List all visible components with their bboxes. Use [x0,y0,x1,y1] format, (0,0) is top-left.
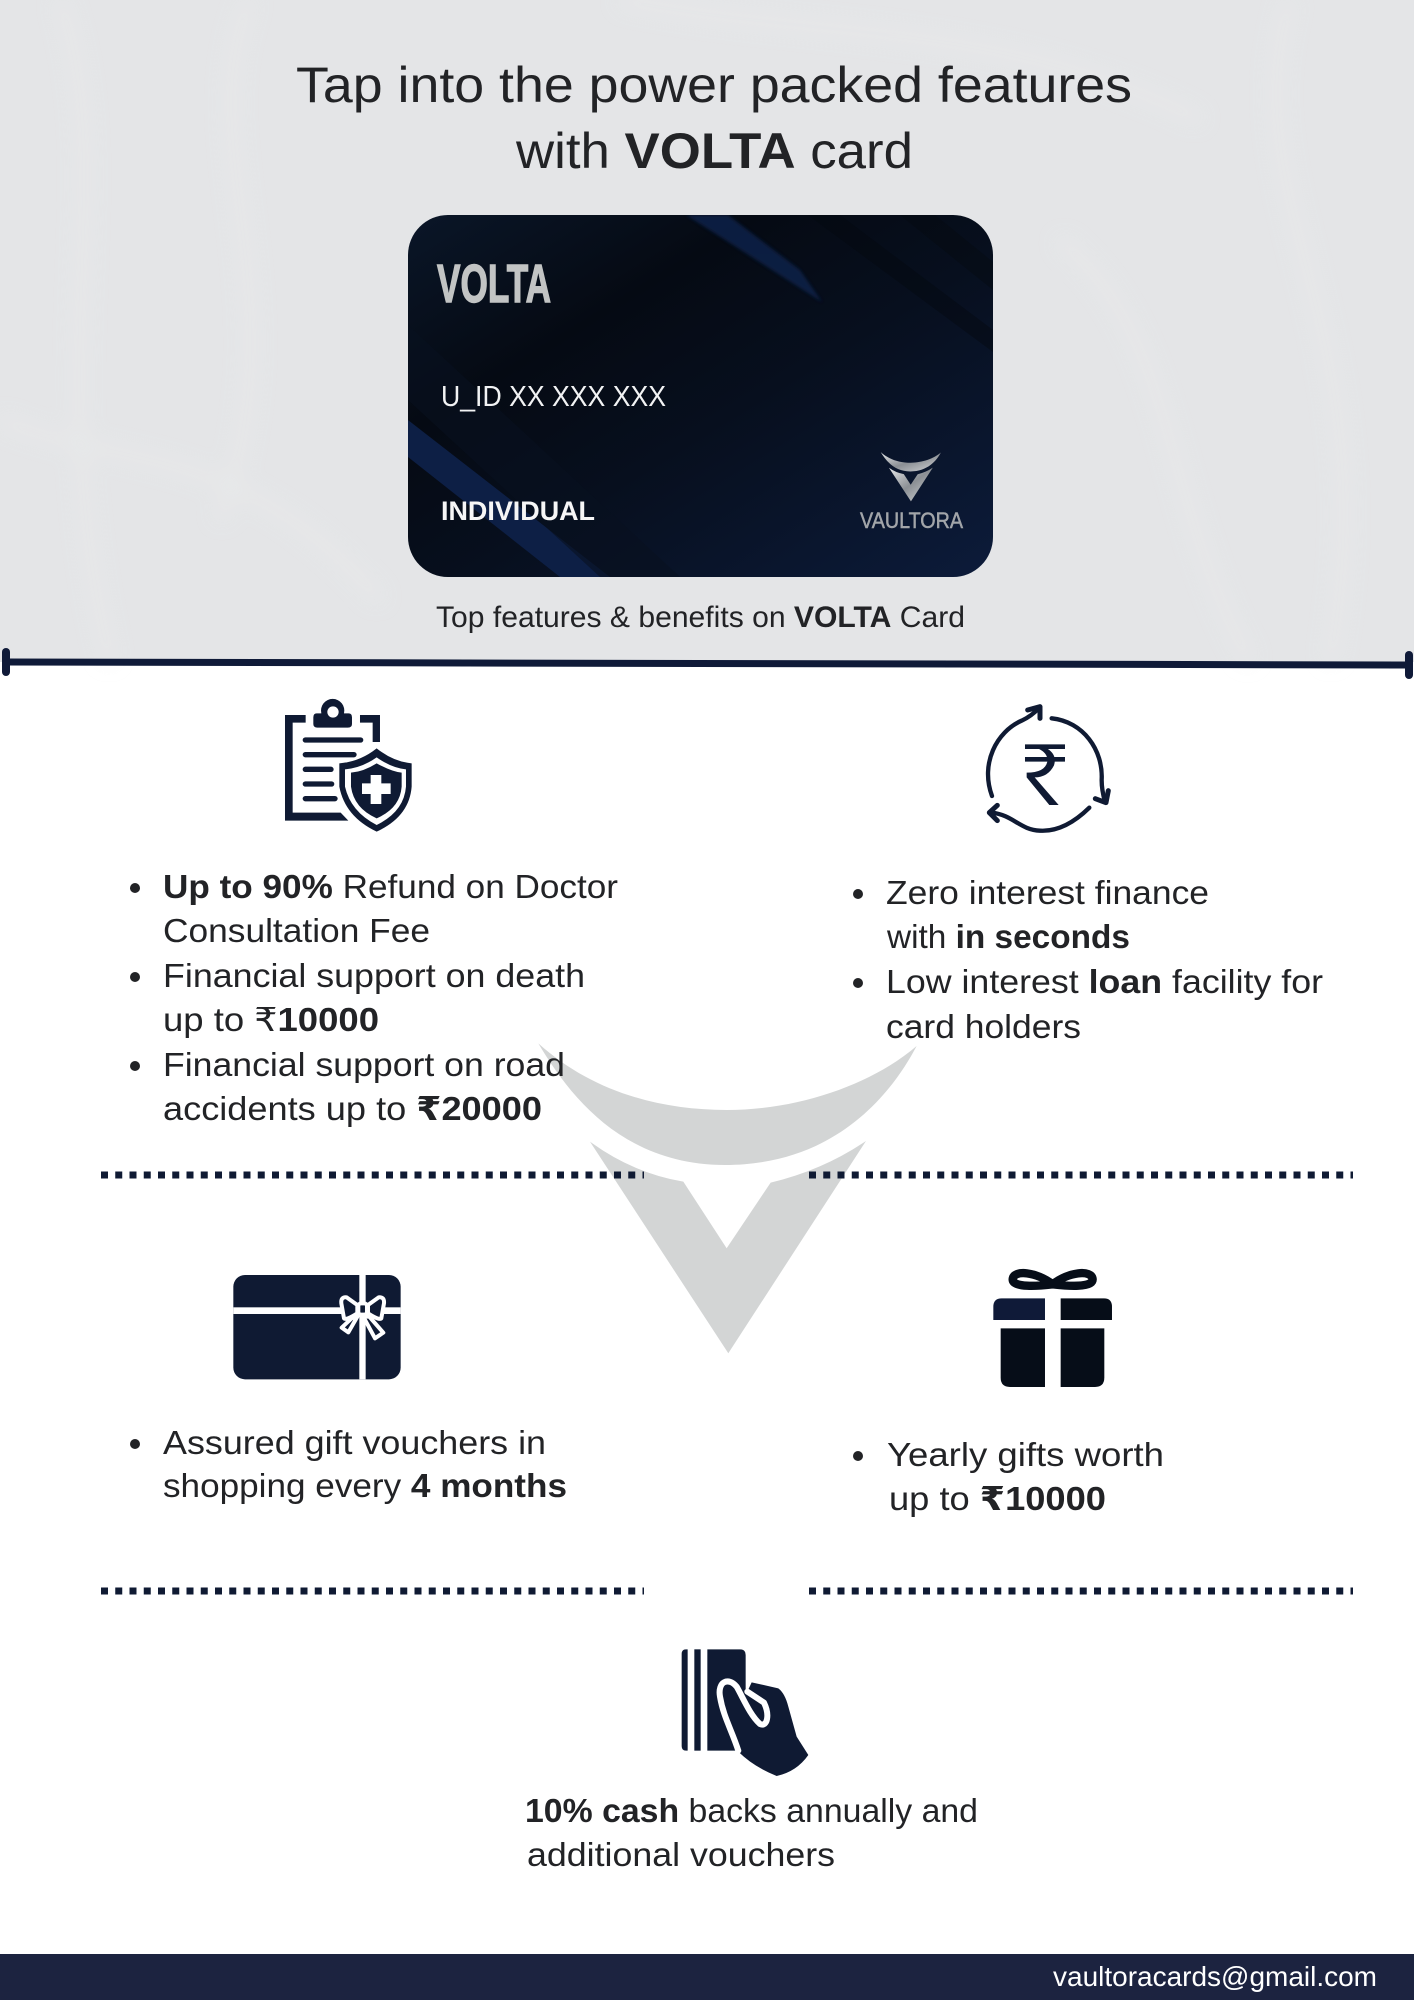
text: gift vouchers: Assured gift vouchers in [163,1424,546,1461]
text: finance benefits: card holders [886,1008,1081,1045]
text: cashback: additional vouchers [527,1836,835,1873]
text: yearly gifts [853,1436,1164,1517]
dotted divider: row 2 [101,1588,1353,1594]
footer email: vaultoracards@gmail.com [1053,1961,1377,1992]
card logo wordmark: VAULTORA [860,508,963,533]
text: health benefits: up to ₹ 10000 [163,1001,379,1038]
card type: INDIVIDUAL [441,496,595,526]
icon: hand holding card [682,1649,808,1776]
text: gift vouchers: shopping every 4 months [163,1467,567,1504]
title: with VOLTA card [515,123,913,179]
icon: rupee cycle [988,707,1108,831]
text: gift vouchers [130,1424,567,1504]
footer band [0,1954,1414,2000]
text: finance benefits: with in seconds [886,918,1130,955]
text: health benefits: Up to 90% Refund on Doctor [163,868,618,905]
section divider with end caps [2,648,1413,679]
text: cashback [525,1792,978,1873]
title: Tap into the power packed features [296,57,1132,113]
icon: gift card [233,1275,401,1379]
text: finance benefits [853,874,1323,1045]
text: yearly gifts: up to ₹10000 [889,1480,1106,1517]
icon: gift box [993,1273,1112,1387]
text: yearly gifts: Yearly gifts worth [887,1436,1164,1473]
card logo [881,452,941,501]
text: health benefits: Consultation Fee [163,912,430,949]
watermark logo [538,1043,917,1353]
text: health benefits: Financial support on road [163,1046,565,1083]
VOLTA card [408,215,993,577]
text: health benefits: accidents up to ₹20000 [163,1090,542,1127]
text: finance benefits: Low interest loan facility for [886,963,1323,1000]
text: cashback: 10% cash backs annually and [525,1792,978,1829]
text: health benefits [130,868,618,1127]
card id: U_ID XX XXX XXX [441,381,666,413]
text: health benefits: Financial support on death [163,957,585,994]
dotted divider: row 1 [101,1172,1353,1178]
icon: clipboard with medical shield [285,699,416,836]
card caption: Top features & benefits on VOLTA Card [436,601,965,634]
text: finance benefits: Zero interest finance [886,874,1209,911]
card brand: VOLTA: VOLTA [437,254,551,314]
title [296,57,1132,179]
